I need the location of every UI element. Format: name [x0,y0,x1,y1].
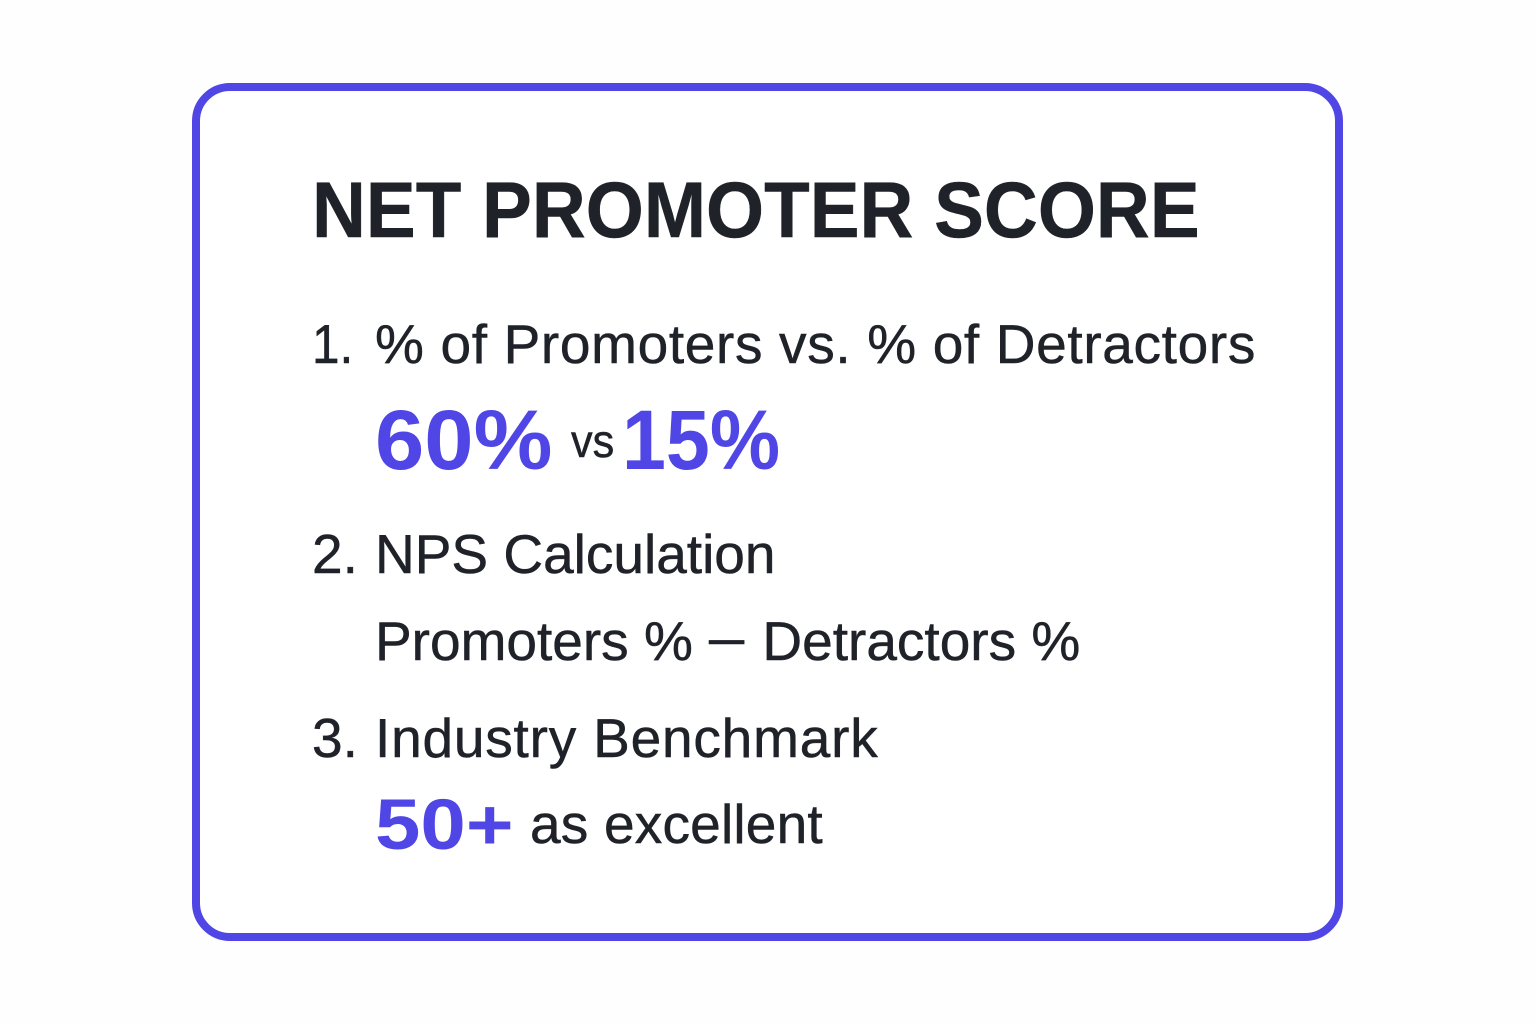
item 2 number: 2. [312,523,358,585]
stat: 60% promoters: 60% [375,393,552,487]
text: as excellent: as excellent [530,793,823,855]
panel: net promoter score card [192,83,1343,941]
stat: 15% detractors: 15% [622,393,780,487]
item 1 heading: % of Promoters vs. % of Detractors [375,313,1256,375]
item 2 heading: NPS Calculation [375,523,775,585]
item 3 heading: Industry Benchmark [375,707,878,769]
formula text: – [709,606,744,668]
item 1 number: 1. [312,313,353,375]
stat: 50+: 50+ [375,786,514,865]
formula text: Promoters % Detractors % [375,610,1080,672]
text: vs: vs [571,415,614,467]
title: NET PROMOTER SCORE [312,165,1200,254]
item 3 number: 3. [312,707,358,769]
